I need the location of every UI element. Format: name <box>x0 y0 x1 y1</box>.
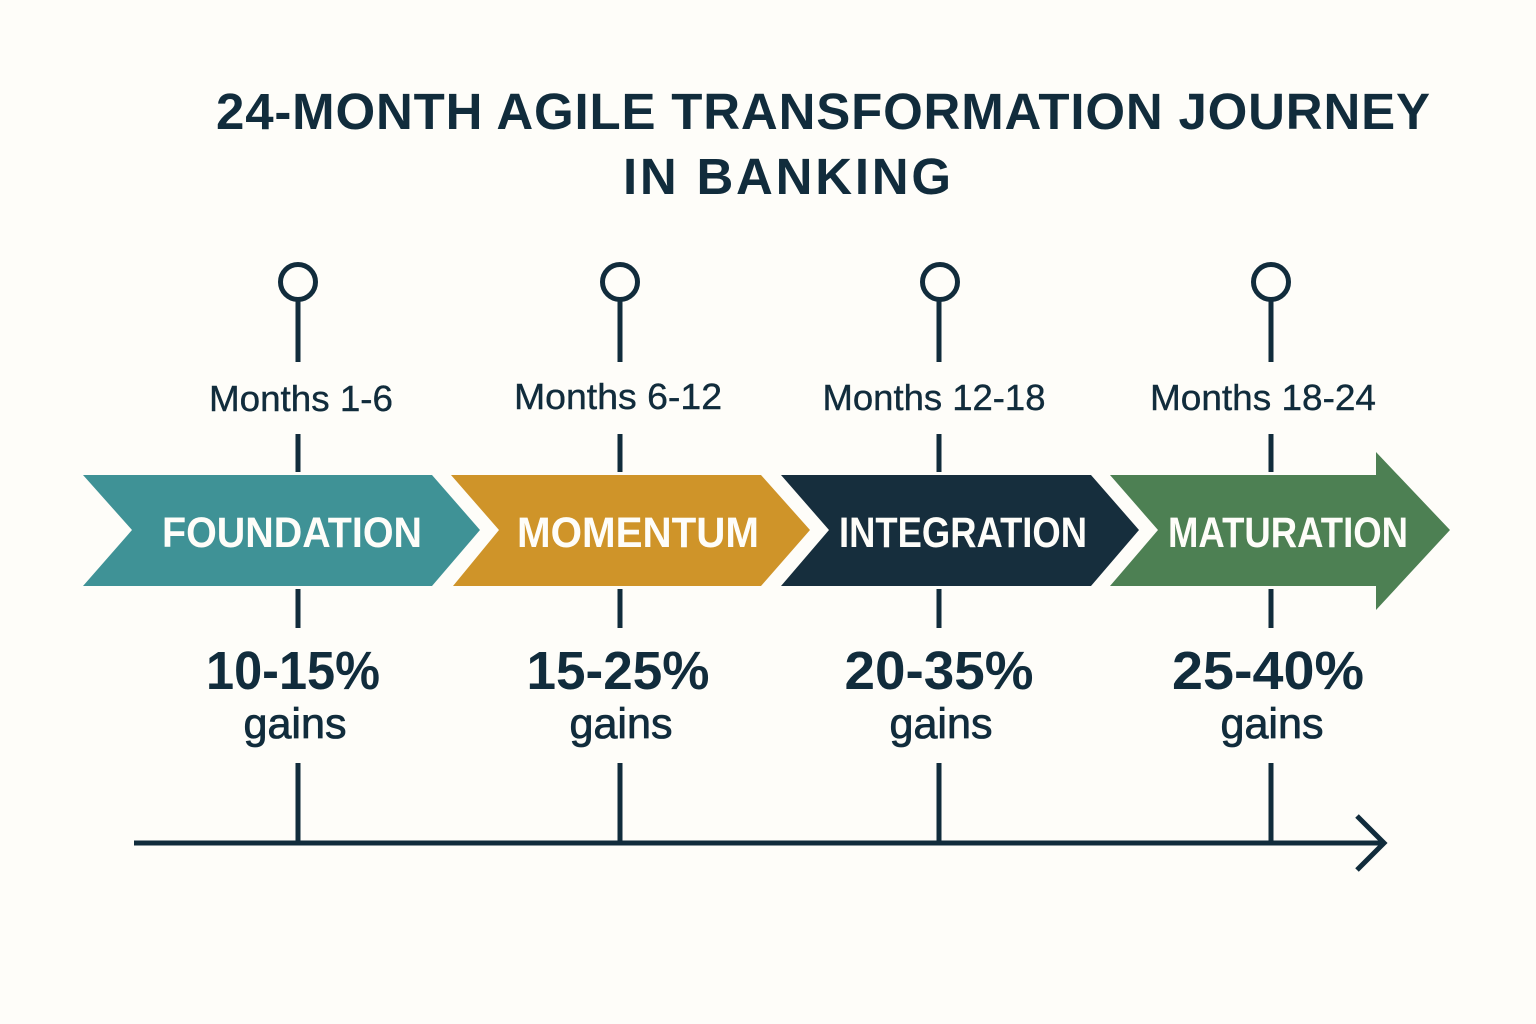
phase: integration <box>781 475 1139 586</box>
gains: momentum: gains <box>570 700 672 748</box>
phase: integration: INTEGRATION <box>839 509 1087 557</box>
phase: momentum: MOMENTUM <box>517 509 759 557</box>
gains: integration <box>844 641 1034 748</box>
gains: maturation <box>1172 641 1364 748</box>
bottom timeline arrow <box>134 816 1384 870</box>
gains: integration: gains <box>890 700 992 748</box>
month labels: Months 6-12 <box>514 376 722 417</box>
milestone circles <box>280 264 1288 300</box>
gains: maturation: gains <box>1220 700 1324 748</box>
title: IN BANKING <box>623 148 951 205</box>
gains: foundation: gains <box>244 700 346 748</box>
phase: maturation: MATURATION <box>1168 509 1408 557</box>
milestone stem lines <box>298 300 1271 843</box>
gains: momentum <box>526 641 710 748</box>
gains: maturation: 25-40% <box>1172 641 1364 701</box>
phase: foundation <box>83 475 480 586</box>
gains: foundation <box>206 641 380 748</box>
month labels: Months 18-24 <box>1150 377 1376 418</box>
title <box>216 83 1430 205</box>
gains: momentum: 15-25% <box>526 641 710 701</box>
month labels <box>209 376 1376 419</box>
phase: foundation: FOUNDATION <box>162 509 422 557</box>
title: 24-MONTH AGILE TRANSFORMATION JOURNEY <box>216 83 1430 140</box>
phase: maturation <box>1110 452 1450 610</box>
gains: foundation: 10-15% <box>206 641 380 701</box>
month labels: Months 12-18 <box>822 377 1046 418</box>
phase: momentum <box>451 475 810 586</box>
gains: integration: 20-35% <box>844 641 1034 701</box>
month labels: Months 1-6 <box>209 378 393 419</box>
